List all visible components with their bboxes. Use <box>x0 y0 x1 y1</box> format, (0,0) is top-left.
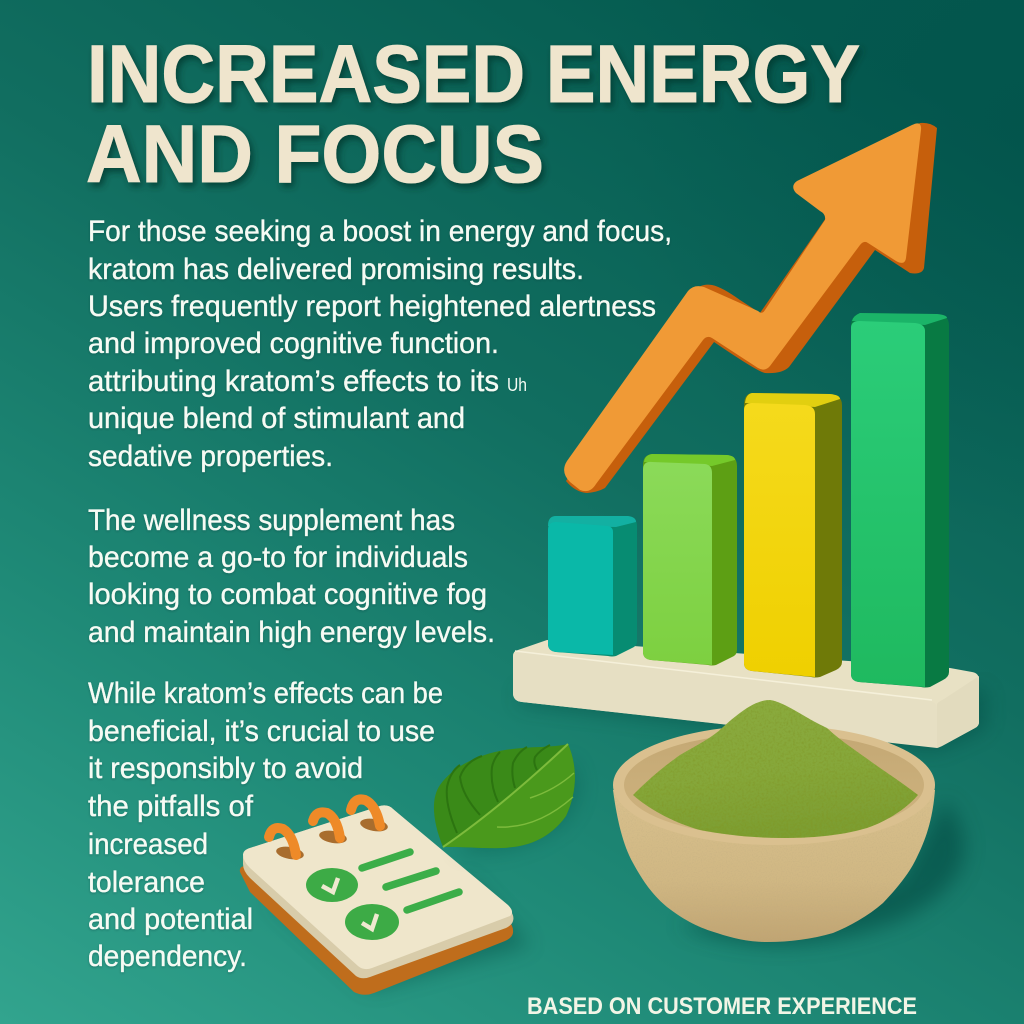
title <box>86 29 860 200</box>
text block: energy and focus results: kratom has delivered promising results. <box>88 253 584 286</box>
text block: responsible use: tolerance <box>88 866 205 899</box>
text block: energy and focus results <box>88 215 672 473</box>
check badge 1 <box>306 868 358 902</box>
bowl shadow <box>680 800 965 944</box>
title: INCREASED ENERGY <box>87 29 860 120</box>
bar: emerald <box>851 313 949 688</box>
text block: responsible use: the pitfalls of <box>88 790 254 823</box>
text block: responsible use <box>88 677 443 973</box>
text block: energy and focus results: For those seeking a boost in energy and focus, <box>88 215 672 248</box>
bowl of kratom powder <box>613 700 965 944</box>
text block: energy and focus results: Users frequently report heightened alertness <box>88 290 656 323</box>
bar: teal <box>548 516 637 656</box>
bowl body <box>613 790 935 942</box>
notepad top face <box>243 805 512 969</box>
bar chart <box>548 313 949 688</box>
text block: wellness supplement: become a go-to for individuals <box>88 541 468 574</box>
text block: responsible use: beneficial, it’s crucial to use <box>88 715 435 748</box>
bar: yellow <box>744 393 842 678</box>
text block: wellness supplement: looking to combat cognitive fog <box>88 578 487 611</box>
text block: responsible use: it responsibly to avoid <box>88 752 363 785</box>
text block: responsible use: increased <box>88 828 208 861</box>
text block: wellness supplement: and maintain high energy levels. <box>88 616 495 649</box>
notepad orange backing <box>240 866 513 995</box>
text block: responsible use: dependency. <box>88 940 247 973</box>
notepad with checklist <box>240 799 530 995</box>
text block: energy and focus results: attributing kratom’s effects to its <box>88 365 499 398</box>
text block: responsible use: While kratom’s effects can be <box>88 677 443 710</box>
leaf <box>434 744 578 852</box>
check badge 2 <box>345 904 399 940</box>
text block: responsible use: and potential <box>88 903 253 936</box>
footer note: BASED ON CUSTOMER EXPERIENCE <box>527 993 917 1020</box>
bowl rim <box>613 725 935 845</box>
base platform <box>513 640 985 750</box>
bar: light green <box>643 454 737 666</box>
ring binders <box>269 799 389 861</box>
bowl interior <box>624 733 924 837</box>
list lines <box>362 852 459 910</box>
kratom powder <box>633 700 918 838</box>
text block: energy and focus results: Uh <box>507 375 527 395</box>
notepad page <box>243 805 513 978</box>
text block: energy and focus results: and improved cognitive function. <box>88 327 499 360</box>
text block: wellness supplement: The wellness supplement has <box>88 504 455 537</box>
text block: energy and focus results: sedative properties. <box>88 440 333 473</box>
title: AND FOCUS <box>86 109 544 200</box>
arrow: rising orange trend <box>564 123 937 493</box>
text block: wellness supplement <box>88 504 495 649</box>
text block: energy and focus results: unique blend of stimulant and <box>88 402 465 435</box>
notepad shadow <box>270 880 530 990</box>
